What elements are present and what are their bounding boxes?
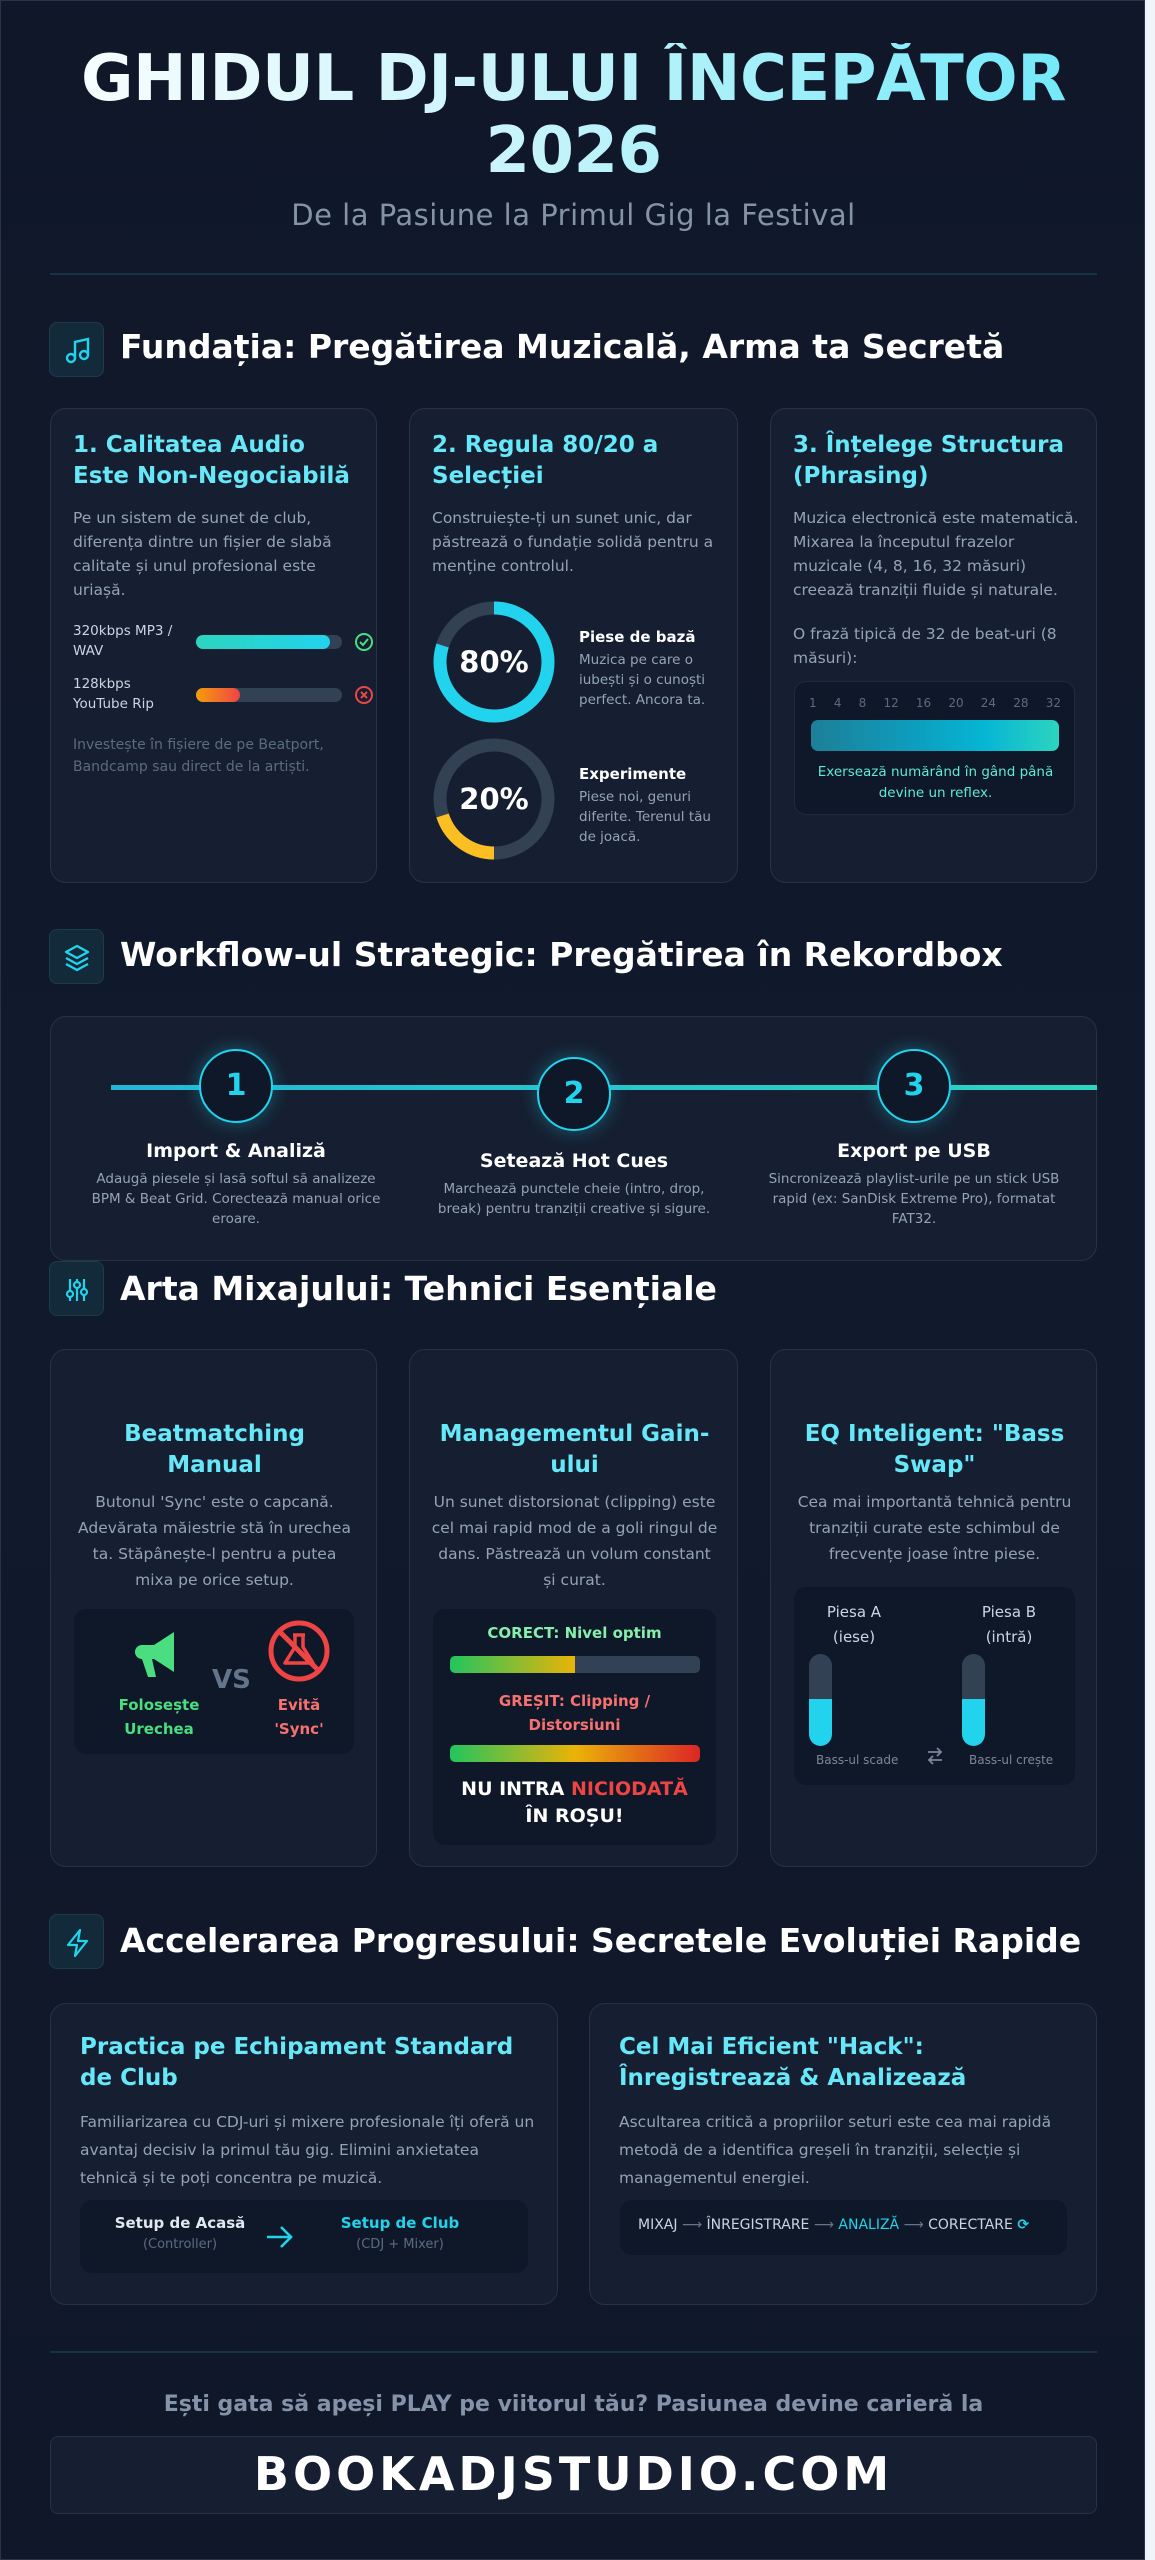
setup comparison: Setup de Acasă bbox=[115, 2214, 245, 2232]
bar: 320kbps: WAV bbox=[73, 643, 103, 659]
setup comparison: (Controller) bbox=[143, 2237, 217, 2252]
step 2 bbox=[438, 1048, 710, 1217]
step 2: Setează Hot Cues bbox=[480, 1150, 668, 1172]
ear vs sync comparison: Folosește bbox=[119, 1696, 199, 1714]
panel: workflow bbox=[50, 1016, 1097, 1261]
title: GHIDUL DJ-ULUI ÎNCEPĂTOR bbox=[81, 42, 1066, 116]
step 3 bbox=[769, 1040, 1059, 1227]
gain meters: GREȘIT: Clipping / bbox=[499, 1692, 650, 1710]
setup comparison: Setup de Club bbox=[341, 2214, 459, 2232]
icon: sliders bbox=[49, 1261, 104, 1316]
bass swap sliders bbox=[794, 1587, 1075, 1785]
card text: Muzica electronică este matematică. Mixarea la începutul frazelor muzicale (4, 8, 16, 32 măsuri) creează tranziții fluide și naturale. bbox=[793, 509, 1078, 599]
heading: Workflow: Workflow-ul Strategic: Pregătirea în Rekordbox bbox=[120, 935, 1003, 974]
bar: 128kbps: YouTube Rip bbox=[73, 696, 154, 712]
step 3: Export pe USB bbox=[837, 1140, 991, 1162]
card title: Practica pe Echipament Standard de Club bbox=[80, 2034, 513, 2091]
bass swap sliders: Piesa A bbox=[827, 1603, 881, 1621]
card title bbox=[805, 1421, 1064, 1478]
phrase bar: 28 bbox=[1013, 696, 1029, 710]
donut: 20%: Piese noi, genuri diferite. Terenul tău de joacă. bbox=[579, 789, 711, 845]
phrase bar: Exersează numărând în gând până bbox=[818, 764, 1053, 780]
timeline line bbox=[111, 1085, 1097, 1090]
card text: Pe un sistem de sunet de club, diferența dintre un fișier de slabă calitate și unul profesional este uriașă. bbox=[73, 509, 332, 599]
card text: Ascultarea critică a propriilor seturi este cea mai rapidă metodă de a identifica greșeli în tranziții, selecție și managementul energiei. bbox=[619, 2113, 1051, 2187]
text: O frază tipică de 32 de beat-uri (8 măsuri): bbox=[793, 625, 1057, 667]
card title: 1. Calitatea Audio Este Non-Negociabilă bbox=[73, 432, 350, 489]
icon: megaphone bbox=[135, 1632, 174, 1677]
phrase bar: 16 bbox=[916, 696, 931, 710]
ear vs sync comparison bbox=[74, 1609, 354, 1754]
heading: Fundatia: Fundația: Pregătirea Muzicală, Arma ta Secretă bbox=[120, 327, 1004, 366]
card text: Un sunet distorsionat (clipping) este cel mai rapid mod de a goli ringul de dans. Păstrează un volum constant și curat. bbox=[432, 1493, 717, 1589]
card text: Butonul 'Sync' este o capcană. Adevărata măiestrie stă în urechea ta. Stăpânește-l pentru a putea mixa pe orice setup. bbox=[78, 1493, 351, 1589]
feedback loop: MIXAJ ⟶ ÎNREGISTRARE ⟶ ANALIZĂ ⟶ CORECTARE ⟳ bbox=[638, 2217, 1029, 2233]
phrase bar: 4 bbox=[834, 696, 841, 710]
gain meters: NU INTRA NICIODATĂ bbox=[461, 1778, 688, 1800]
bass swap sliders: (intră) bbox=[986, 1628, 1032, 1646]
panel: beatmatching bbox=[50, 1349, 377, 1867]
step 2: 2 bbox=[564, 1076, 584, 1111]
card title: EQ Inteligent: "Bass bbox=[805, 1421, 1064, 1447]
gain meters: Distorsiuni bbox=[529, 1716, 620, 1734]
donut: 80%: 80% bbox=[459, 645, 529, 679]
title: 2026 bbox=[485, 114, 662, 188]
bass swap sliders: (iese) bbox=[833, 1628, 875, 1646]
step 2: Marchează punctele cheie (intro, drop, break) pentru tranziții creative și sigure. bbox=[438, 1181, 710, 1217]
panel: hack bbox=[589, 2003, 1097, 2305]
phrase bar: 20 bbox=[948, 696, 964, 710]
donut: 20%: 20% bbox=[459, 782, 529, 816]
card title: ului bbox=[550, 1452, 599, 1478]
card text: Construiește-ți un sunet unic, dar păstrează o fundație solidă pentru a menține controlul. bbox=[432, 509, 713, 575]
phrase bar bbox=[794, 681, 1075, 815]
panel: bass swap bbox=[770, 1349, 1097, 1867]
card title: 3. Înțelege Structura (Phrasing) bbox=[793, 432, 1064, 489]
phrase bar: 24 bbox=[981, 696, 996, 710]
title bbox=[1, 43, 1146, 187]
card title: 2. Regula 80/20 a Selecției bbox=[432, 432, 658, 489]
card title: Managementul Gain- bbox=[440, 1421, 709, 1447]
donut: 80%: Piese de bază bbox=[579, 628, 695, 646]
card text: Familiarizarea cu CDJ-uri și mixere profesionale îți oferă un avantaj decisiv la primul tău gig. Elimini anxietatea tehnică și te poți concentra pe muzică. bbox=[80, 2113, 534, 2187]
icon: lightning bbox=[49, 1914, 104, 1969]
panel: echipament bbox=[50, 2003, 558, 2305]
donut: 20% bbox=[434, 738, 711, 860]
bass swap sliders: Bass-ul crește bbox=[969, 1753, 1053, 1767]
gain meters: CORECT: Nivel optim bbox=[487, 1624, 662, 1642]
phrase bar: 12 bbox=[883, 696, 899, 710]
icon: no flask bbox=[268, 1620, 330, 1682]
card title: Cel Mai Eficient "Hack": Înregistrează & Analizează bbox=[619, 2034, 966, 2091]
feedback loop bbox=[620, 2200, 1067, 2255]
bar: 320kbps: 320kbps MP3 / bbox=[73, 623, 172, 639]
card title: Beatmatching bbox=[124, 1421, 305, 1447]
card title: Manual bbox=[167, 1452, 262, 1478]
setup comparison: (CDJ + Mixer) bbox=[356, 2237, 444, 2252]
gain meters: ÎN ROȘU! bbox=[525, 1805, 624, 1827]
setup comparison bbox=[80, 2200, 528, 2273]
panel: calitatea audio bbox=[50, 408, 377, 883]
card title bbox=[124, 1421, 305, 1478]
gain meters bbox=[433, 1609, 716, 1845]
card title: Swap" bbox=[894, 1452, 975, 1478]
bar: 320kbps bbox=[73, 623, 373, 659]
heading: Accelerarea: Accelerarea Progresului: Secretele Evoluției Rapide bbox=[120, 1921, 1081, 1960]
phrase bar: 32 bbox=[1046, 696, 1061, 710]
subtitle: De la Pasiune la Primul Gig la Festival bbox=[291, 198, 856, 232]
panel: regula 80/20 bbox=[409, 408, 738, 883]
step 3: 3 bbox=[904, 1068, 924, 1103]
card text: Cea mai importantă tehnică pentru tranziții curate este schimbul de frecvențe joase între piese. bbox=[798, 1493, 1071, 1563]
step 3: Sincronizează playlist-urile pe un stick USB rapid (ex: SanDisk Extreme Pro), formatat FAT32. bbox=[769, 1171, 1059, 1227]
bar: 128kbps bbox=[73, 676, 373, 712]
ear vs sync comparison: 'Sync' bbox=[274, 1720, 324, 1738]
step 1 bbox=[92, 1040, 380, 1227]
icon: layers bbox=[49, 929, 104, 984]
ear vs sync comparison: Evită bbox=[278, 1696, 320, 1714]
bass swap sliders: Bass-ul scade bbox=[816, 1753, 898, 1767]
phrase bar: 1 bbox=[809, 696, 817, 710]
donut: 80%: Muzica pe care o iubești și o cunoști perfect. Ancora ta. bbox=[579, 652, 705, 708]
footer text: Ești gata să apeși PLAY pe viitorul tău? Pasiunea devine carieră la bbox=[164, 2392, 983, 2417]
icon: music note bbox=[49, 322, 104, 377]
footer brand box bbox=[50, 2436, 1097, 2514]
step 1: Adaugă piesele și lasă softul să analizeze BPM & Beat Grid. Corectează manual orice eroare. bbox=[92, 1171, 380, 1227]
bar: 128kbps: 128kbps bbox=[73, 676, 131, 692]
step 1: Import & Analiză bbox=[146, 1140, 326, 1162]
donut: 80% bbox=[434, 602, 705, 722]
heading: Arta Mixajului: Arta Mixajului: Tehnici Esențiale bbox=[120, 1269, 717, 1308]
phrase bar: 8 bbox=[859, 696, 866, 710]
ear vs sync comparison: Urechea bbox=[124, 1720, 194, 1738]
donut: 20%: Experimente bbox=[579, 765, 686, 783]
ear vs sync comparison: VS bbox=[212, 1665, 251, 1695]
panel: structura bbox=[770, 408, 1097, 883]
card title bbox=[440, 1421, 709, 1478]
footer brand box: BOOKADJSTUDIO.COM bbox=[254, 2447, 893, 2501]
footnote: Investește în fișiere de pe Beatport, Bandcamp sau direct de la artiști. bbox=[73, 737, 324, 775]
step 1: 1 bbox=[226, 1068, 246, 1103]
bass swap sliders: Piesa B bbox=[982, 1603, 1036, 1621]
phrase bar: devine un reflex. bbox=[879, 785, 992, 801]
panel: gain bbox=[409, 1349, 738, 1867]
